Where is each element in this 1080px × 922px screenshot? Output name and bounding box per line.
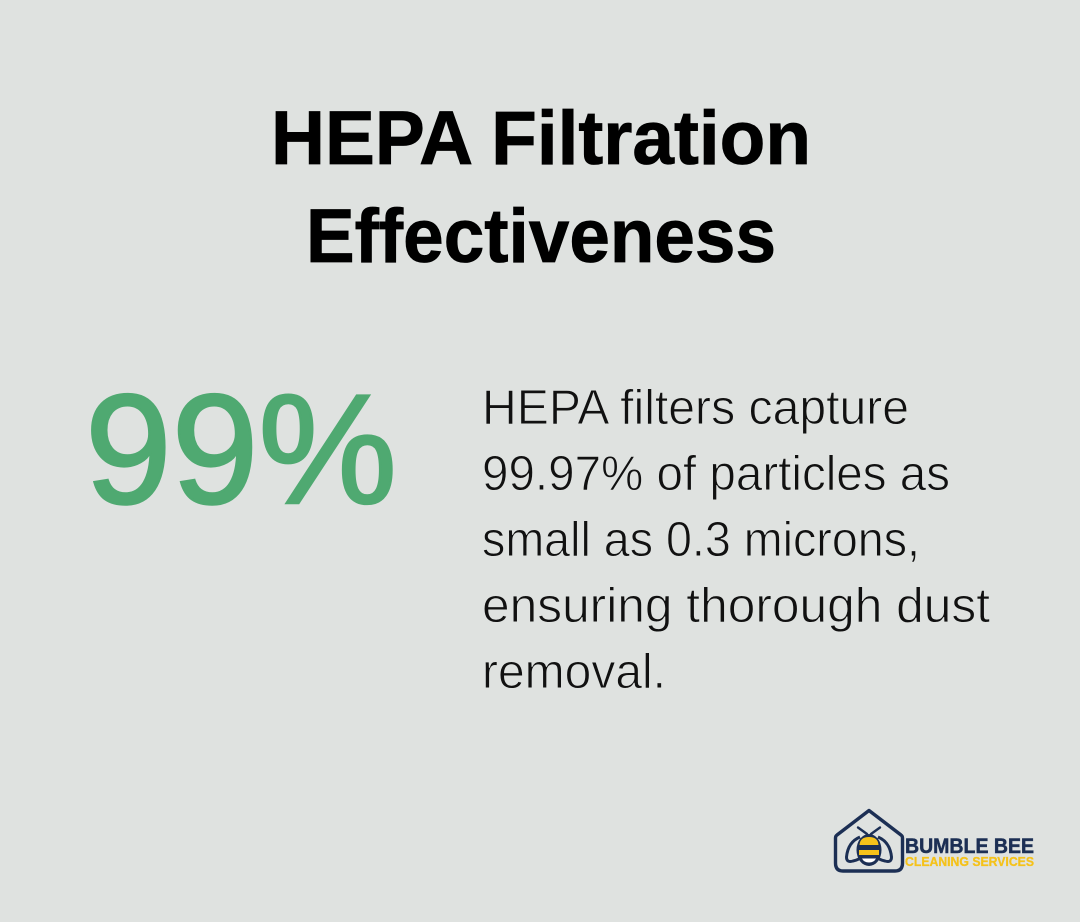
logo: Bumble Bee Cleaning Services — [836, 810, 1034, 871]
title: HEPA Filtration — [271, 96, 811, 181]
title — [271, 96, 811, 279]
description text: small as 0.3 microns, — [482, 513, 920, 567]
description text: removal. — [482, 645, 666, 699]
big statistic: 99%: 99% — [85, 363, 397, 537]
icon: house with bee — [836, 810, 902, 871]
logo wordmark: BUMBLE BEE — [905, 835, 1034, 858]
description text: ensuring thorough dust — [482, 579, 990, 633]
description text — [482, 381, 990, 699]
description text: HEPA filters capture — [482, 381, 909, 435]
logo tagline: CLEANING SERVICES — [905, 854, 1034, 869]
title: Effectiveness — [306, 194, 776, 279]
description text: 99.97% of particles as — [482, 447, 950, 501]
